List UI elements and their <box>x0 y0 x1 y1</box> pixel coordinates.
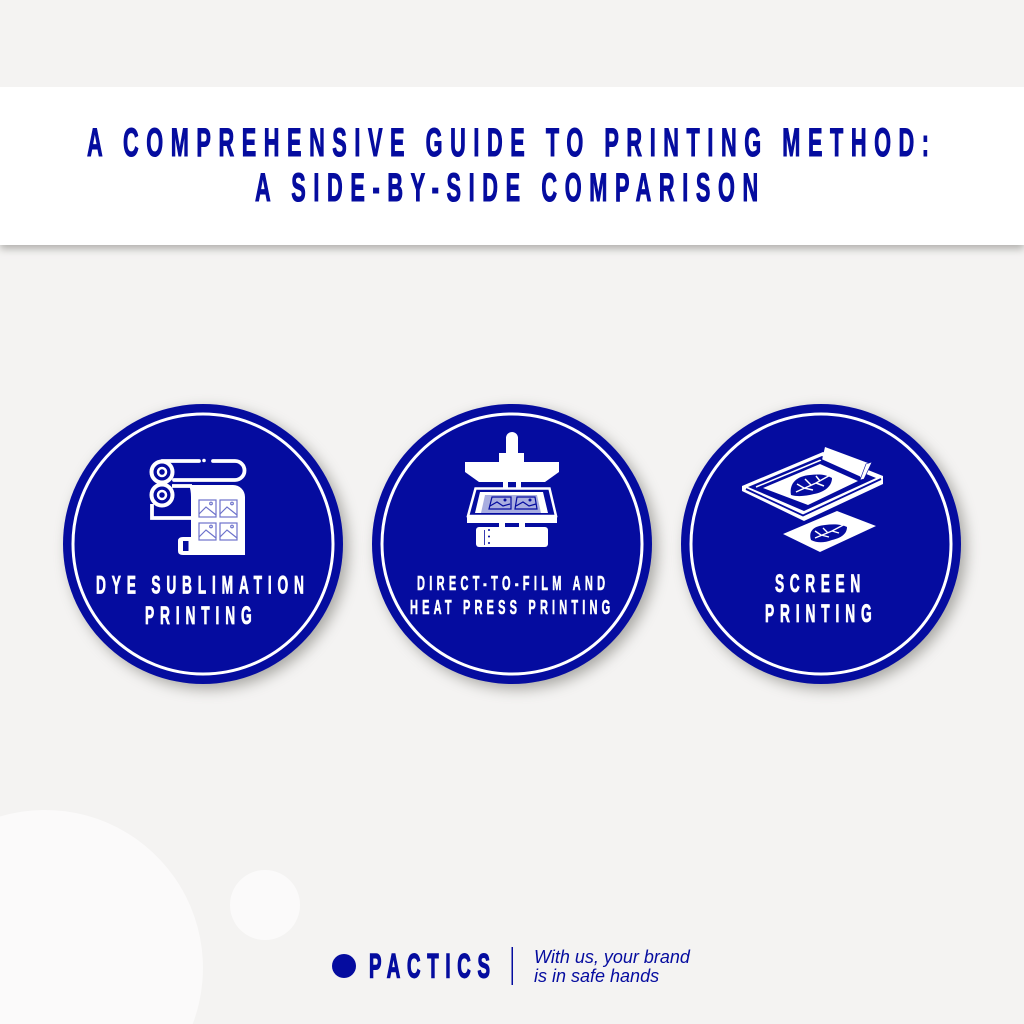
label: SCREEN <box>775 571 860 598</box>
logo dot <box>332 954 356 978</box>
label: HEAT PRESS PRINTING <box>410 597 610 619</box>
icon: roll printer <box>152 459 245 555</box>
image thumbnails <box>199 500 237 540</box>
panel: direct-to-film and heat press printing <box>372 404 657 689</box>
brand name: PACTICS <box>369 947 490 985</box>
tagline <box>534 947 691 986</box>
title banner <box>0 87 1024 249</box>
label <box>765 571 872 628</box>
divider <box>512 947 513 985</box>
title: A SIDE-BY-SIDE COMPARISON <box>255 165 758 210</box>
footer brand <box>332 947 691 986</box>
panel: dye sublimation printing <box>63 404 348 689</box>
icon: screen frame and print <box>742 447 883 552</box>
leaf on screen <box>791 473 834 496</box>
label <box>96 572 304 630</box>
label: DIRECT-TO-FILM AND <box>417 573 605 595</box>
label: PRINTING <box>765 601 872 628</box>
tagline: is in safe hands <box>534 966 659 986</box>
tagline: With us, your brand <box>534 947 691 967</box>
panel: screen printing <box>681 404 966 689</box>
title: A COMPREHENSIVE GUIDE TO PRINTING METHOD: <box>87 120 929 165</box>
leaf on print <box>810 522 849 542</box>
title <box>87 120 929 210</box>
label <box>410 573 610 619</box>
label: PRINTING <box>145 603 252 630</box>
icon: heat press <box>465 432 559 547</box>
label: DYE SUBLIMATION <box>96 572 304 600</box>
